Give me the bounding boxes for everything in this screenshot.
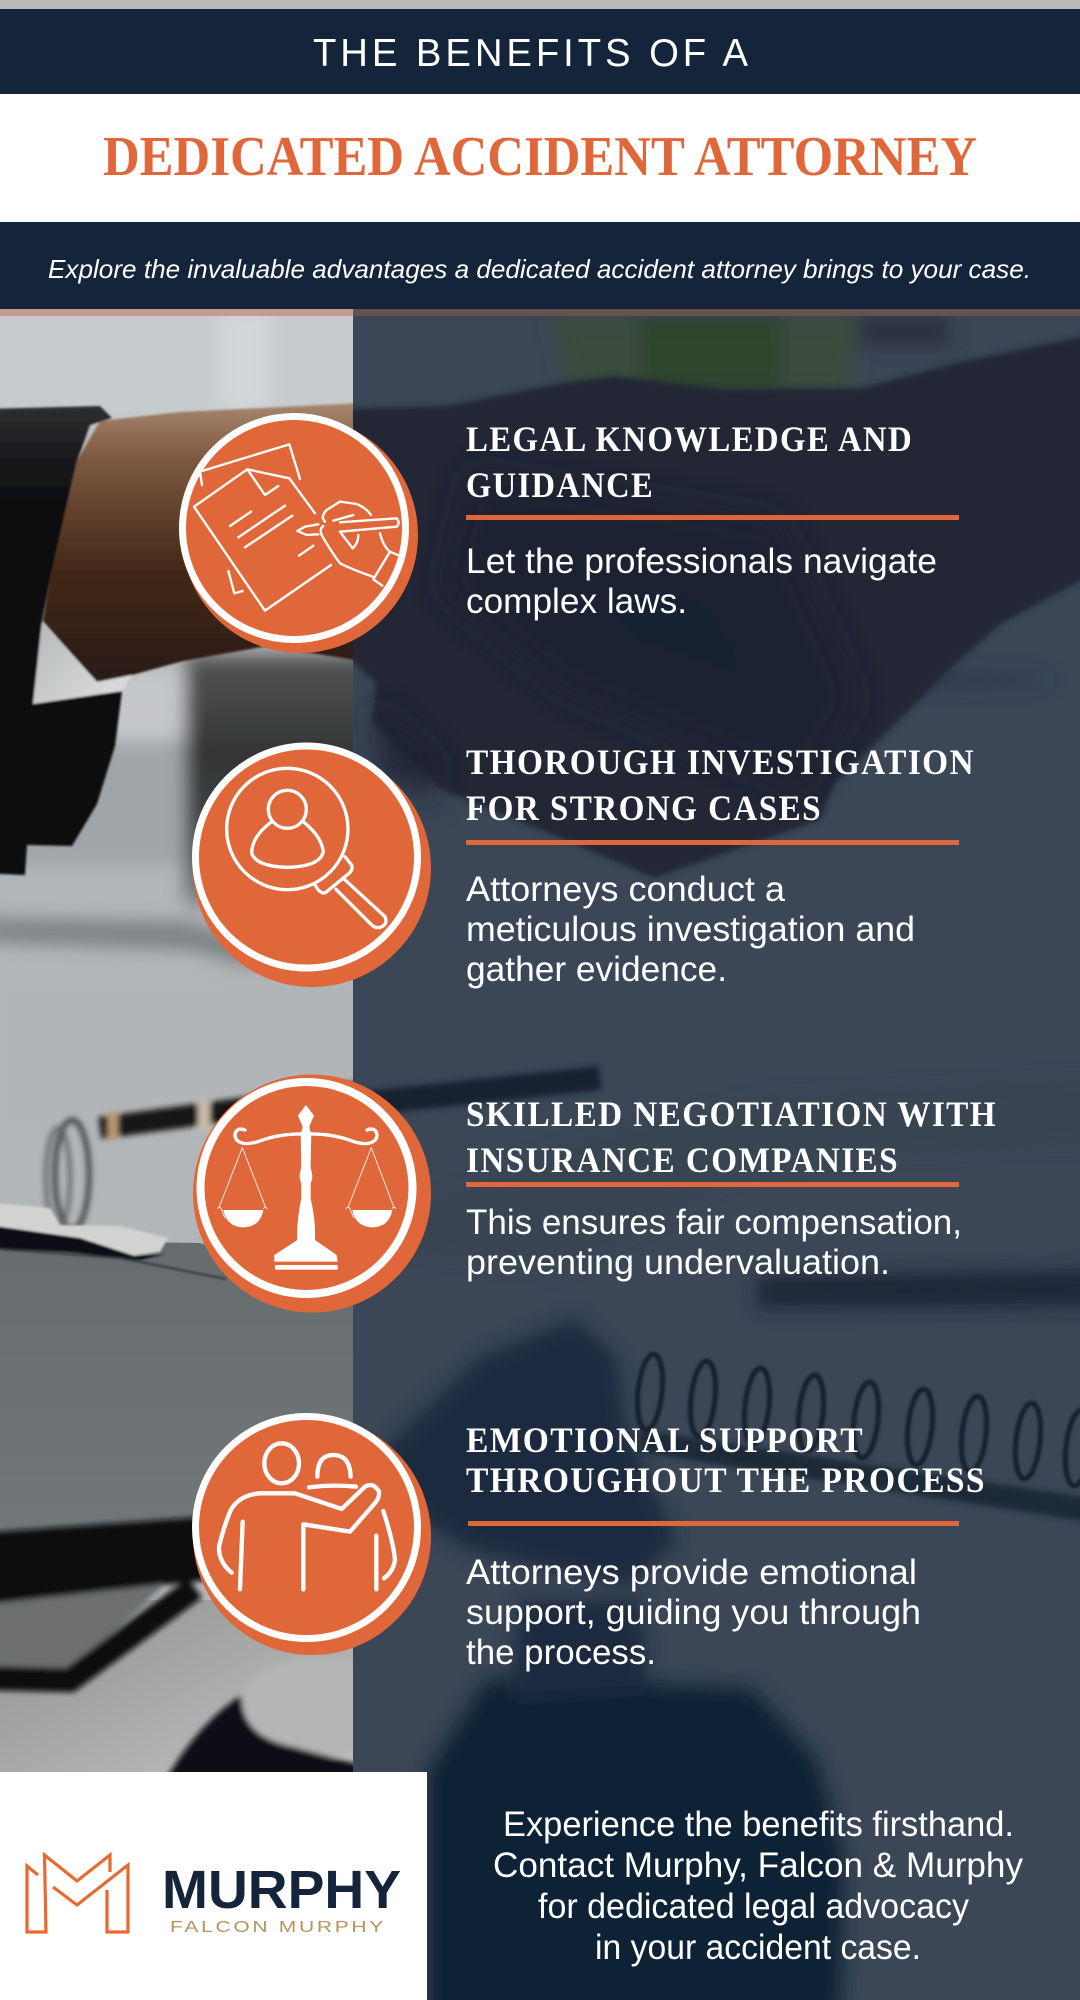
- gavel and desk tones: [353, 1318, 677, 1586]
- call to action text: for dedicated legal advocacy: [538, 1887, 969, 1926]
- header band: navy top: [0, 9, 1080, 94]
- call to action text: Experience the benefits firsthand.: [503, 1805, 1014, 1844]
- benefit 2 text: THOROUGH INVESTIGATION: [466, 742, 975, 782]
- benefit 4 text: the process.: [466, 1633, 656, 1672]
- benefit 1 text: [466, 419, 959, 621]
- notebook spiral: [634, 1353, 1080, 1487]
- right photo panel with navy overlay: [340, 316, 1080, 2000]
- benefit 3 text: [466, 1094, 997, 1282]
- logo panel: [0, 1772, 427, 2000]
- icon: document and writing hand: [182, 416, 418, 653]
- benefit 3 text: preventing undervaluation.: [466, 1243, 890, 1282]
- top background strip: [0, 0, 1080, 9]
- benefit 2 text: gather evidence.: [466, 950, 727, 989]
- handshake arm and sleeve: [0, 402, 380, 875]
- pen on right: [350, 1078, 600, 1105]
- accent band under header: [0, 309, 1080, 316]
- call to action text: [493, 1805, 1024, 1967]
- benefit 2 text: meticulous investigation and: [466, 910, 915, 949]
- subtitle band: navy: [0, 222, 1080, 309]
- subtitle: Explore the invaluable advantages a dedicated accident attorney brings to your case.: [48, 254, 1031, 284]
- benefit 3 text: INSURANCE COMPANIES: [466, 1140, 899, 1180]
- logo wordmark: MURPHY: [162, 1860, 401, 1920]
- benefit 2 text: [466, 742, 975, 989]
- call to action text: in your accident case.: [595, 1928, 921, 1967]
- icon: magnifying glass over person: [193, 746, 431, 987]
- benefit 1 text: GUIDANCE: [466, 465, 654, 505]
- benefit 4 text: EMOTIONAL SUPPORT: [466, 1420, 864, 1460]
- benefit 4 text: [466, 1420, 986, 1672]
- pen and binder rings: [46, 1090, 380, 1230]
- benefit 1 text: complex laws.: [466, 582, 687, 621]
- icon: person comforting another person: [193, 1416, 431, 1655]
- title: DEDICATED ACCIDENT ATTORNEY: [103, 126, 977, 188]
- benefit 1 text: Let the professionals navigate: [466, 542, 937, 581]
- logo tagline: FALCON MURPHY: [170, 1919, 386, 1936]
- benefit 4 text: THROUGHOUT THE PROCESS: [466, 1460, 986, 1500]
- title band: white: [0, 94, 1080, 222]
- heading: the benefits of a: THE BENEFITS OF A: [313, 32, 752, 75]
- left photo panel: [0, 316, 353, 1772]
- benefit 4 text: support, guiding you through: [466, 1593, 921, 1632]
- benefit 3 text: SKILLED NEGOTIATION WITH: [466, 1094, 997, 1134]
- notebook edge: [640, 1430, 1080, 1522]
- benefit 2 text: FOR STRONG CASES: [466, 788, 822, 828]
- icon: scales of justice: [193, 1074, 431, 1312]
- handshake silhouette: [340, 335, 1080, 878]
- logo mark: [27, 1855, 128, 1932]
- benefit 2 text: Attorneys conduct a: [466, 870, 786, 909]
- call to action text: Contact Murphy, Falcon & Murphy: [493, 1846, 1024, 1885]
- benefit 1 text: LEGAL KNOWLEDGE AND: [466, 419, 913, 459]
- dark binder: [0, 1240, 360, 1540]
- benefit 4 text: Attorneys provide emotional: [466, 1553, 917, 1592]
- benefit 3 text: This ensures fair compensation,: [466, 1203, 962, 1242]
